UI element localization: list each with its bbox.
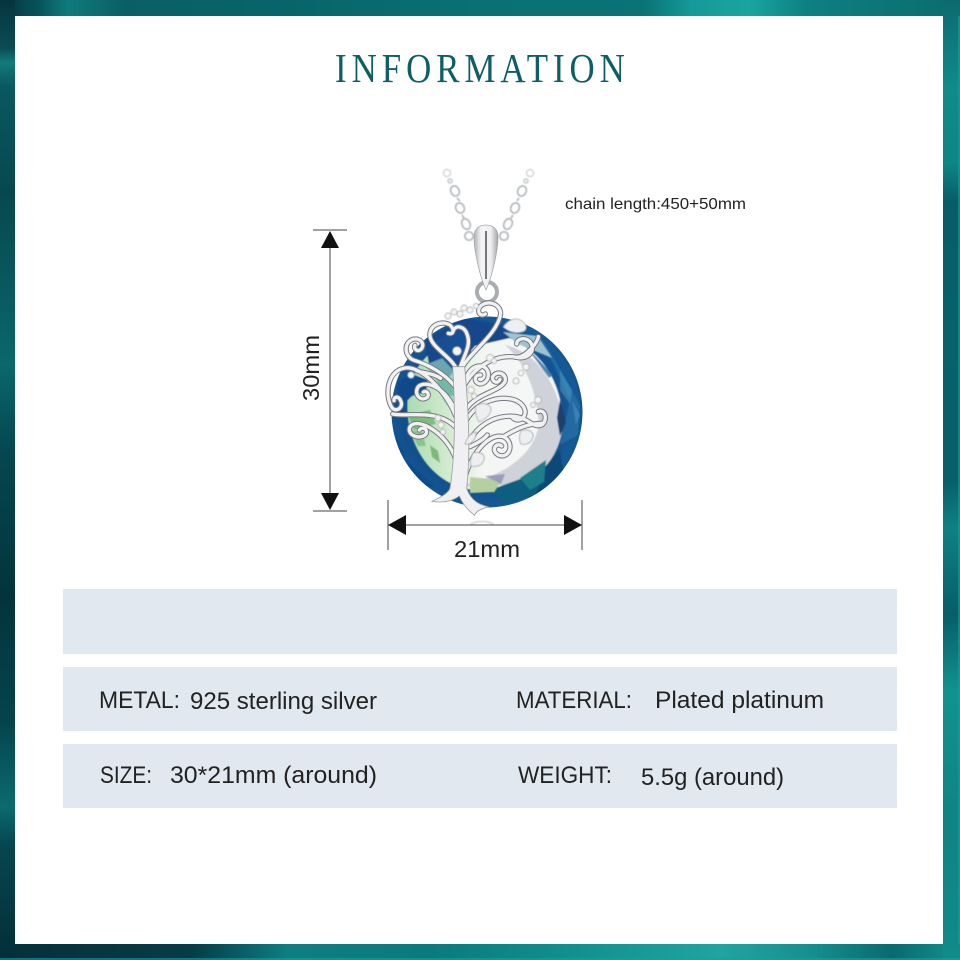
spec row: metal and material: 925 sterling silver [190, 688, 377, 715]
title: INFORMATION [335, 46, 625, 92]
chain length label: chain length:450+50mm [565, 196, 746, 213]
spec row: size and weight [63, 744, 897, 808]
trunk [432, 367, 488, 515]
spec row: metal and material: METAL: [99, 687, 180, 714]
spec row: metal and material: Plated platinum [655, 687, 824, 714]
bail [474, 225, 498, 290]
spec row: size and weight: 5.5g (around) [641, 764, 784, 791]
spec row: size and weight: 30*21mm (around) [170, 762, 377, 789]
spec row: size and weight: WEIGHT: [518, 762, 612, 789]
inner pale crystal [407, 335, 562, 490]
height dimension 30mm [298, 230, 347, 511]
width dimension 21mm [388, 500, 582, 562]
grey crescent [467, 345, 563, 487]
empty spec row [63, 589, 897, 654]
spec row: metal and material: MATERIAL: [516, 687, 632, 714]
reflection beneath pendant [470, 521, 494, 525]
tree of life [388, 303, 545, 515]
height dimension 30mm: 30mm [298, 335, 324, 401]
green reflections [408, 410, 436, 430]
spec row: size and weight: SIZE: [100, 762, 152, 789]
necklace chain [444, 170, 534, 240]
white gemstones [408, 303, 541, 435]
tree highlights [388, 303, 545, 477]
width dimension 21mm: 21mm [454, 536, 520, 562]
blue behind top scrolls [398, 374, 428, 402]
jump ring [477, 282, 497, 302]
pendant photo illustration [380, 170, 590, 525]
lower teal facets [492, 478, 538, 503]
spec row: metal and material [63, 667, 897, 731]
crystal disc [392, 316, 582, 508]
tree outlines [388, 303, 545, 477]
hearts [465, 319, 533, 466]
lower crystal colours [470, 477, 502, 493]
upper dark blue wedge [425, 318, 510, 376]
